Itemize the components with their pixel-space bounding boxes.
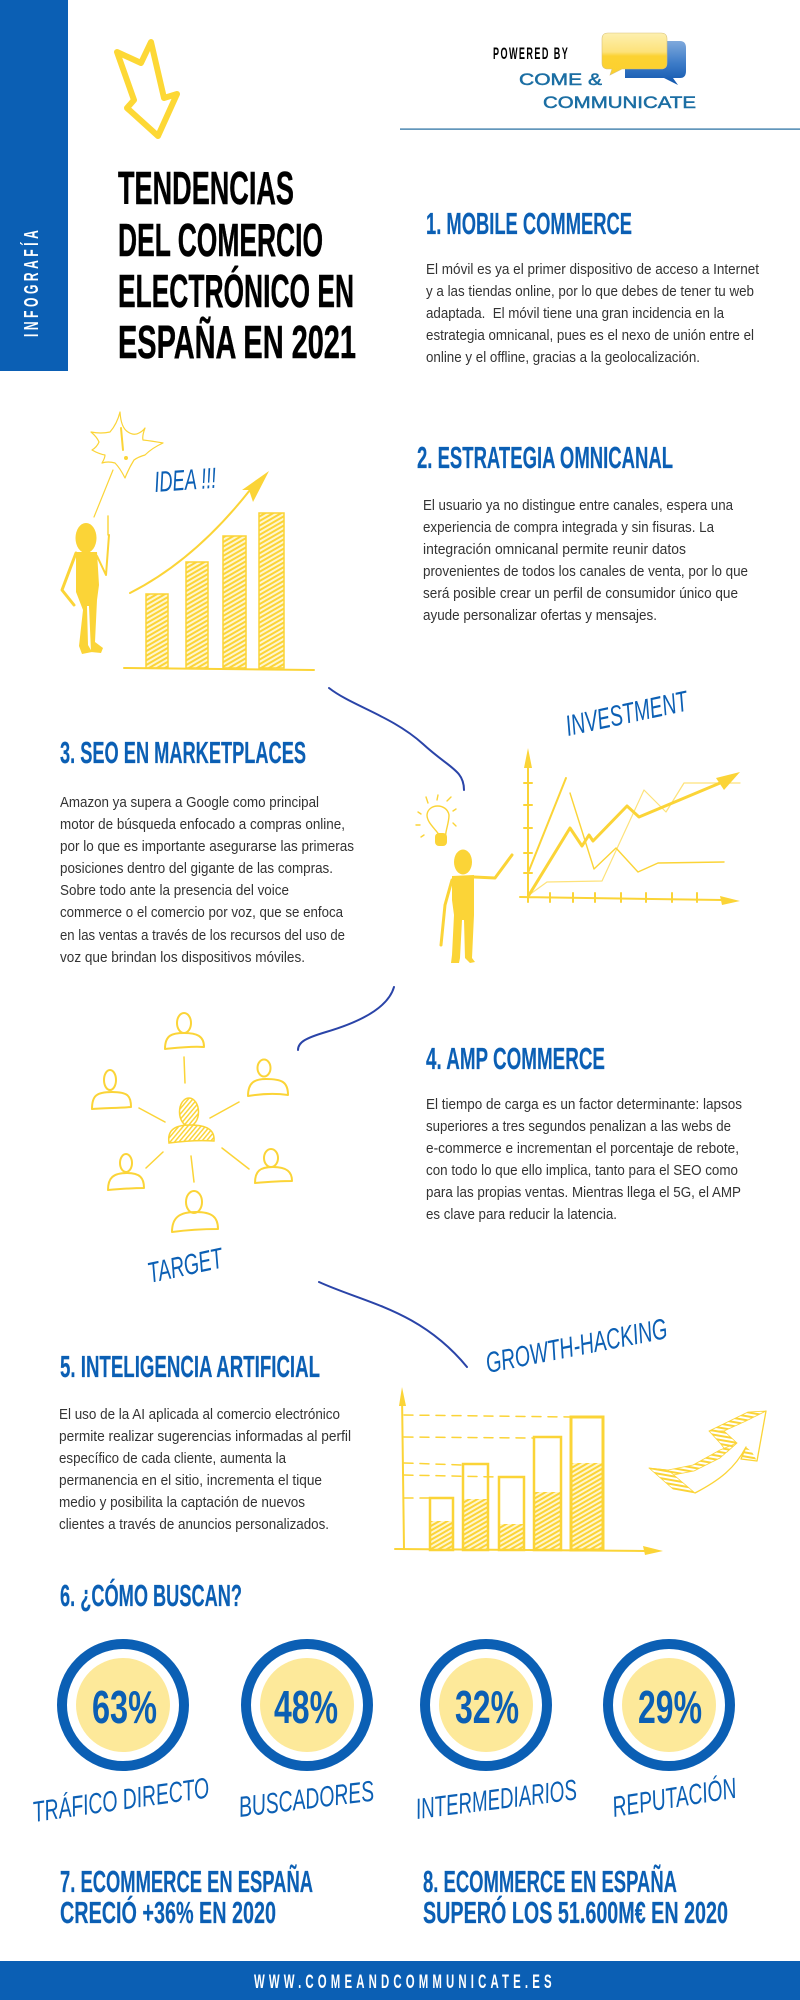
axes [520,748,740,905]
caption: TRÁFICO DIRECTO [30,1771,211,1829]
stat: 48% [237,1644,376,1824]
main title [118,162,356,368]
person bottom right [255,1149,292,1183]
icon: exclamation burst [91,412,163,517]
text block 4: es clave para reducir la latencia. [426,1207,617,1223]
text block 3: posiciones dentro del gigante de las compras. [60,861,333,877]
section 3: seo en marketplaces [60,735,354,966]
text block 4: para las propias ventas. Mientras llega el 5G, el AMP [426,1185,741,1201]
figure: presenter [441,850,512,963]
logo: powered by come and communicate [493,33,696,112]
text block 5: permanencia en el sitio, incrementa el tique [59,1473,322,1489]
arrow: curved growth arrow [649,1411,766,1493]
section 7: ecommerce growth [60,1864,313,1930]
person centre [169,1098,214,1143]
text block 5: El uso de la AI aplicada al comercio electrónico [59,1407,340,1423]
bars [146,513,284,668]
section 7: ecommerce growth: CRECIÓ +36% EN 2020 [60,1894,276,1930]
connector curve 3 [319,1282,467,1367]
text block 1: estrategia omnicanal, pues es el nexo de unión entre el [426,328,754,344]
text block 3: commerce o el comercio por voz, que se enfoca [60,905,344,921]
text block 2: El usuario ya no distingue entre canales, espera una [423,498,734,514]
text block 4: con todo lo que ello implica, tanto para el SEO como [426,1163,738,1179]
text block 1 [426,262,759,366]
text block 3: motor de búsqueda enfocado a compras online, [60,817,345,833]
section 1: mobile commerce [426,206,759,366]
section 4: amp commerce [426,1041,742,1223]
text block 1: online y el offline, gracias a la geolocalización. [426,350,700,366]
caption: INTERMEDIARIOS [414,1774,579,1826]
main title: ELECTRÓNICO EN [118,265,354,317]
person top right [248,1060,288,1096]
website url: WWW.COMEANDCOMMUNICATE.ES [254,1972,552,1993]
trend lines [528,772,740,895]
icon: blue speech bubble [625,41,686,85]
text block 4: superiores a tres segundos penalizan a las webs de [426,1119,731,1135]
text block 5: permite realizar sugerencias informadas al perfil [59,1429,351,1445]
stat: 29% [608,1644,739,1824]
caption: REPUTACIÓN [610,1772,739,1824]
label: growth-hacking: GROWTH-HACKING [483,1313,670,1380]
icon: light bulb [416,795,456,846]
person top left [92,1070,131,1109]
section 5: inteligencia artificial [59,1349,351,1533]
text block 4 [426,1097,742,1223]
text block 1: y a las tiendas online, por lo que debes de tener tu web [426,284,754,300]
caption: BUSCADORES [237,1776,376,1824]
text block 1: adaptada. El móvil tiene una gran incidencia en la [426,306,725,322]
logo word: communicate: COMMUNICATE [543,93,696,112]
text block 3: por lo que es importante asegurarse las primeras [60,839,354,855]
text block 3: voz que brindan los dispositivos móviles. [60,950,305,966]
axes [395,1387,663,1555]
section 8: ecommerce revenue [423,1864,728,1930]
text block 2: experiencia de compra integrada y sin fisuras. La [423,520,715,536]
illustration: idea chart [62,412,314,670]
label: idea: IDEA !!! [153,463,217,499]
stat: 63%: 63% [92,1681,157,1733]
text block 2 [423,498,748,624]
text block 5 [59,1407,351,1533]
stat: 32%: 32% [455,1681,519,1733]
vertical label: INFOGRAFÍA [20,230,43,337]
connector lines [139,1057,249,1182]
heading 5: 5. INTELIGENCIA ARTIFICIAL [60,1349,320,1384]
text block 5: clientes a través de anuncios personalizados. [59,1517,329,1533]
person top [165,1013,204,1049]
dashed guides [404,1415,570,1498]
main title: TENDENCIAS [118,162,294,214]
text block 3: Sobre todo ante la presencia del voice [60,883,289,899]
section 2: estrategia omnicanal [417,440,748,624]
main title: ESPAÑA EN 2021 [118,316,356,368]
stat: 32% [414,1644,579,1826]
label: target: TARGET [145,1242,227,1290]
heading 6: 6. ¿CÓMO BUSCAN? [60,1577,242,1613]
section 7: ecommerce growth: 7. ECOMMERCE EN ESPAÑA [60,1864,313,1899]
text block 5: específico de cada cliente, aumenta la [59,1451,287,1467]
text block 3: en las ventas a través de los recursos del uso de [60,928,345,944]
figure: thinking person [62,516,109,654]
text block 2: integración omnicanal permite reunir datos [423,542,686,558]
heading 3: 3. SEO EN MARKETPLACES [60,735,306,770]
stat: 29%: 29% [638,1681,702,1733]
person bottom [172,1191,218,1232]
text block 3 [60,795,354,966]
label: investment: INVESTMENT [563,685,692,743]
text block 4: El tiempo de carga es un factor determinante: lapsos [426,1097,742,1113]
connector curve 1 [329,688,464,790]
illustration: investment chart [416,685,740,963]
text block 2: ayude personalizar ofertas y mensajes. [423,608,657,624]
connector curve 2 [298,987,394,1050]
text block 2: será posible crear un perfil de consumidor único que [423,586,738,602]
heading 4: 4. AMP COMMERCE [426,1041,605,1076]
stat: 63% [30,1644,211,1829]
section 6: como buscan [30,1577,739,1829]
footer band [0,1961,800,2000]
illustration: target audience [92,1013,292,1290]
bars [429,1417,603,1550]
text block 5: medio y posibilita la captación de nuevos [59,1495,305,1511]
text block 4: e-commerce e incrementan el porcentaje de rebote, [426,1141,739,1157]
text block 1: El móvil es ya el primer dispositivo de acceso a Internet [426,262,759,278]
illustration: growth hacking chart [395,1313,766,1555]
side band: infografía [0,0,68,371]
heading 1: 1. MOBILE COMMERCE [426,206,632,241]
text block 3: Amazon ya supera a Google como principal [60,795,319,811]
powered by label: POWERED BY [493,44,568,63]
icon: yellow speech bubble [602,33,667,75]
text block 2: provenientes de todos los canales de venta, por lo que [423,564,748,580]
person bottom left [108,1154,144,1190]
icon: yellow zigzag arrow [117,42,177,136]
arrow: upward trend [130,471,269,593]
stat: 48%: 48% [274,1681,338,1733]
logo word: come and: COME & [519,70,603,89]
main title: DEL COMERCIO [118,214,323,266]
